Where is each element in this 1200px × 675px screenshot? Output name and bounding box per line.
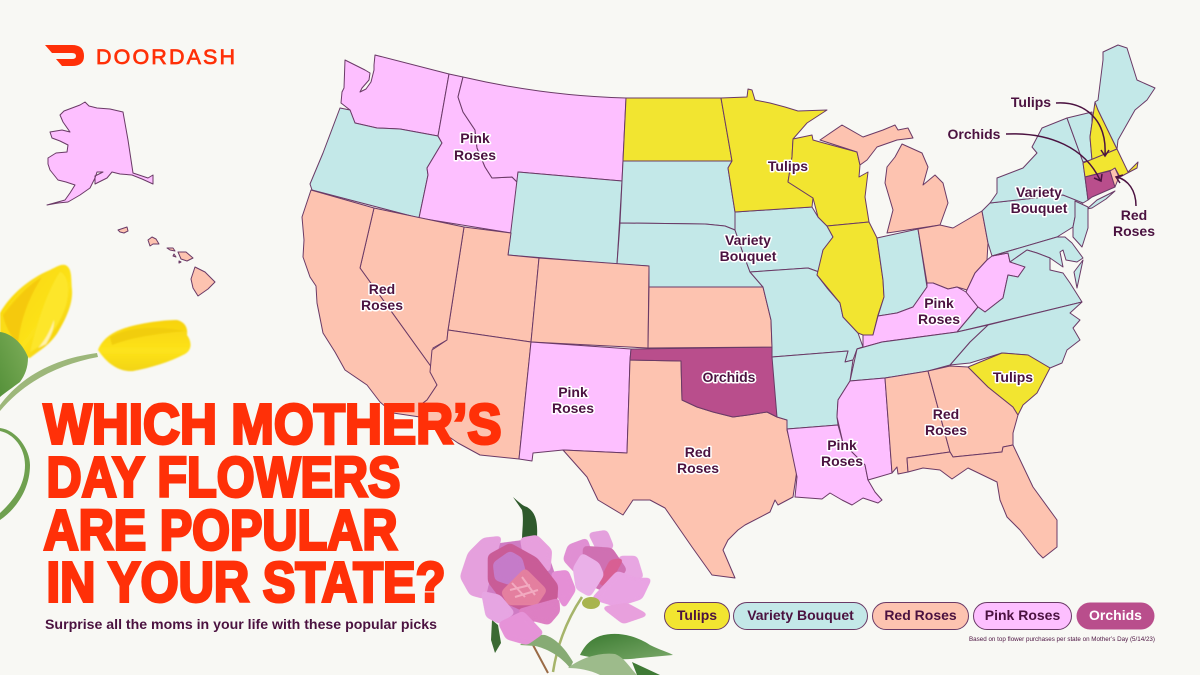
state: Texas: [563, 360, 797, 578]
legend: Tulips: [664, 602, 730, 630]
state: New Jersey: [1073, 201, 1088, 247]
state: Virginia: [957, 250, 1083, 332]
callout: Orchids Connecticut: [948, 126, 1102, 181]
DoorDash logo: [45, 45, 235, 69]
state: Oregon: [310, 108, 442, 218]
state: Idaho: [419, 74, 517, 233]
legend: Variety Bouquet: [734, 602, 868, 630]
callout: Tulips New Hampshire: [1011, 94, 1109, 156]
state: Indiana: [877, 229, 927, 316]
tulip flower right: [98, 320, 191, 371]
state: Kentucky: [857, 283, 978, 349]
title: IN YOUR STATE?: [46, 550, 446, 614]
state: New Mexico: [519, 342, 631, 461]
label: Pink Roses northwest: Roses: [454, 147, 496, 163]
state: Connecticut: [1085, 171, 1115, 200]
state: Iowa: [735, 207, 833, 272]
callout: Red Roses Rhode Island: Roses: [1113, 223, 1155, 239]
state: Vermont: [1067, 112, 1092, 162]
state: Arkansas: [772, 351, 853, 429]
state: Alabama: [885, 371, 950, 474]
label: Pink Roses New Mexico: Roses: [552, 400, 594, 416]
label: Red Roses west: Roses: [361, 297, 403, 313]
state: Florida: [907, 445, 1057, 558]
tulip leaf upper: [0, 332, 28, 397]
state: Tennessee: [850, 325, 988, 381]
map of the United States: [47, 45, 1155, 578]
state: California: [302, 190, 437, 417]
state: Wisconsin: [788, 135, 869, 226]
big peony stamens: [510, 577, 538, 597]
callouts with arrows: [948, 94, 1155, 239]
footnote: Based on top flower purchases per state on Mother’s Day (5/14/23): [969, 636, 1155, 643]
callout: Red Roses Rhode Island: Red: [1121, 207, 1147, 223]
state: Louisiana: [787, 425, 882, 505]
legend: Red Roses: [872, 602, 968, 630]
callout: Orchids Connecticut: Orchids: [948, 126, 1001, 142]
small left leaf: [491, 620, 501, 653]
state: Mississippi: [837, 378, 892, 480]
title: DAY FLOWERS: [46, 446, 400, 510]
callout: Tulips New Hampshire: Tulips: [1011, 94, 1051, 110]
legend: Pink Roses: Pink Roses: [985, 607, 1060, 623]
title: WHICH MOTHER’S: [44, 392, 502, 456]
state: Alaska: [47, 102, 153, 205]
wordmark: DOORDASH: [96, 45, 235, 69]
state: Pennsylvania: [982, 195, 1083, 256]
top leaf: [513, 497, 537, 540]
title: [44, 392, 502, 614]
stems: [553, 597, 582, 672]
state: Utah: [448, 227, 539, 342]
label: Pink Roses Kentucky: Pink: [924, 295, 954, 311]
label: Pink Roses New Mexico: Pink: [558, 384, 588, 400]
label: Red Roses Alabama Georgia: Red: [933, 406, 959, 422]
legend: Pink Roses: [974, 602, 1072, 630]
label: Tulips South Carolina: Tulips: [993, 369, 1033, 385]
label: Red Roses west: Red: [369, 281, 395, 297]
tulips illustration: [0, 265, 191, 520]
big peony bloom: [460, 535, 576, 645]
legend: Variety Bouquet: Variety Bouquet: [747, 607, 854, 623]
state: Kansas: [648, 287, 772, 348]
state: New Hampshire: [1090, 102, 1117, 160]
label: Red Roses Texas: Red: [685, 444, 711, 460]
label: Pink Roses northwest: Pink: [460, 130, 490, 146]
state: Illinois: [817, 222, 884, 335]
state: New York: [990, 118, 1115, 209]
stem: [0, 353, 98, 411]
state: Nebraska: [617, 223, 763, 287]
state: North Dakota: [623, 98, 732, 161]
legend: Red Roses: Red Roses: [884, 607, 957, 623]
state: Colorado: [531, 258, 649, 348]
label: Variety Bouquet plains: Variety: [725, 232, 771, 248]
legend: Tulips: Tulips: [677, 607, 717, 623]
state: Montana: [458, 77, 626, 182]
state: North Carolina: [950, 302, 1082, 368]
label: Variety Bouquet northeast: Variety: [1016, 184, 1062, 200]
map labels: [361, 130, 1068, 476]
label: Tulips midwest: Tulips: [768, 158, 808, 174]
state: Hawaii: [118, 227, 215, 296]
subtitle: Surprise all the moms in your life with these popular picks: [45, 617, 437, 632]
label: Variety Bouquet northeast: Bouquet: [1011, 200, 1068, 216]
state: Maryland and Delaware: [992, 237, 1083, 267]
state: Georgia: [928, 366, 1018, 457]
icon: DoorDash swoosh: [45, 45, 84, 66]
label: Red Roses Alabama Georgia: Roses: [925, 422, 967, 438]
state: South Dakota: [620, 161, 735, 230]
state: Ohio: [918, 211, 988, 290]
label: Pink Roses Louisiana: Pink: [827, 437, 857, 453]
title: ARE POPULAR: [44, 498, 398, 562]
tulip leaf lower: [0, 428, 30, 520]
legend: Orchids: [1076, 602, 1154, 630]
state: Minnesota: [721, 89, 827, 212]
legend: [664, 602, 1154, 630]
peony flowers illustration: [460, 497, 673, 675]
label: Variety Bouquet plains: Bouquet: [720, 248, 777, 264]
state: Washington: [341, 55, 449, 136]
state: Maine: [1095, 45, 1155, 149]
state: West Virginia: [966, 250, 1037, 312]
label: Orchids Oklahoma: Orchids: [703, 369, 756, 385]
label: Red Roses Texas: Roses: [677, 460, 719, 476]
tulip flower left: [0, 265, 72, 358]
label: Pink Roses Louisiana: Roses: [821, 453, 863, 469]
legend: Orchids: Orchids: [1089, 607, 1142, 623]
state: Nevada: [360, 208, 464, 368]
state: Wyoming: [508, 172, 622, 264]
lower leaves: [520, 634, 673, 675]
state: Michigan: [820, 125, 948, 233]
peony bud: [582, 597, 600, 609]
state: Missouri: [750, 268, 863, 362]
state: Oklahoma: [630, 347, 777, 417]
state: Massachusetts: [1083, 149, 1138, 177]
state: South Carolina: [968, 353, 1050, 415]
state: Rhode Island: [1110, 168, 1119, 187]
callout: Red Roses Rhode Island: [1113, 175, 1155, 239]
small peony bloom: [563, 530, 652, 624]
label: Pink Roses Kentucky: Roses: [918, 311, 960, 327]
state: Arizona: [420, 330, 531, 459]
